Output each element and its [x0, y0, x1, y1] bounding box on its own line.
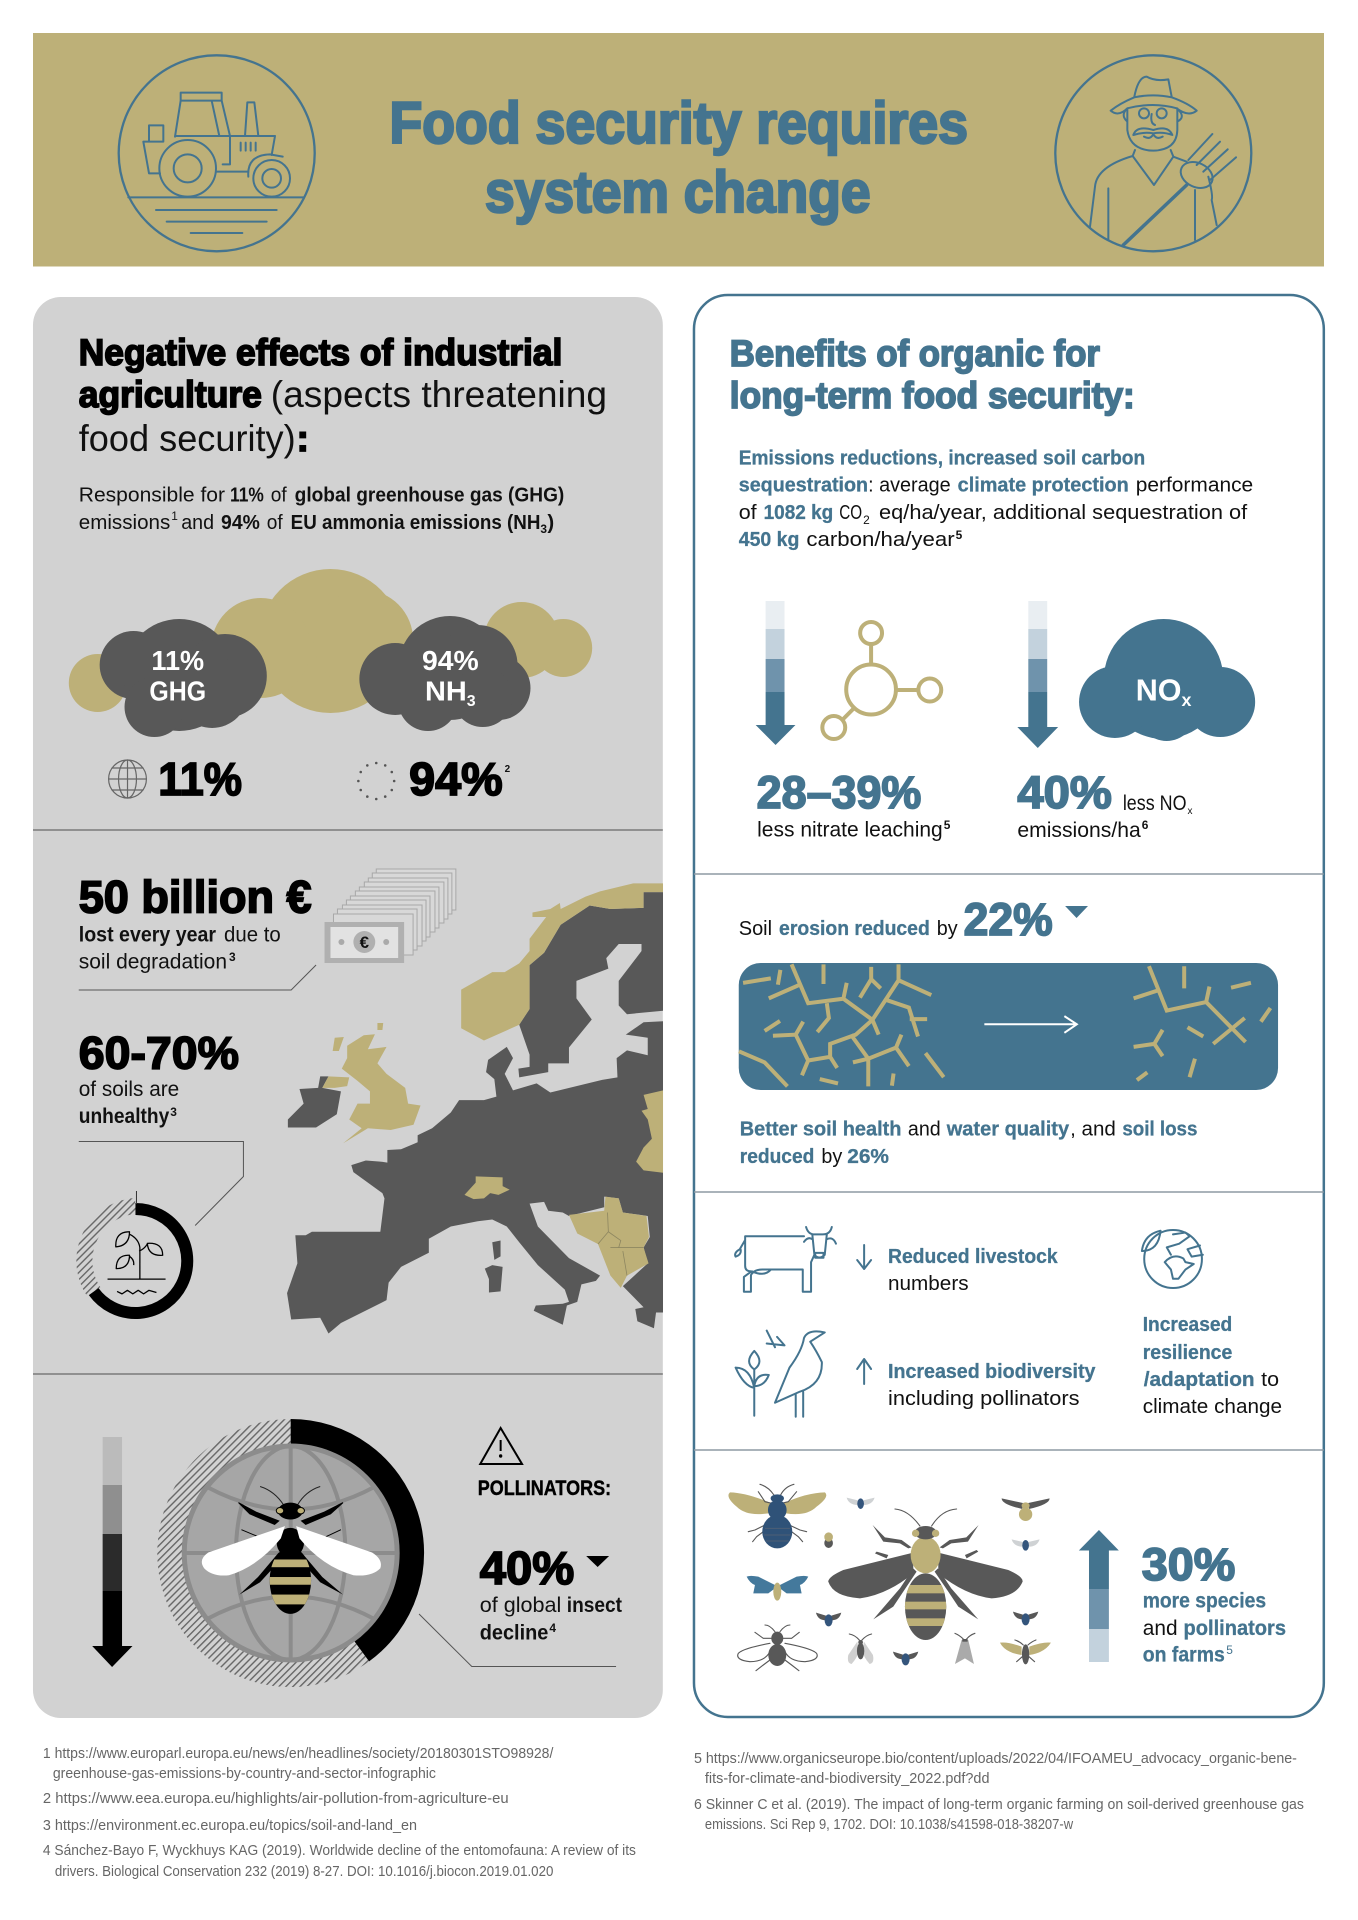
text: increased resilience: to — [1261, 1368, 1279, 1391]
gold emission clouds — [69, 569, 592, 713]
heading: benefits — [730, 333, 1135, 416]
stat: nitrate leaching — [757, 767, 951, 842]
stat: pollinators 40%: POLLINATORS: — [478, 1477, 611, 1500]
text: increased resilience: /adaptation — [1144, 1368, 1255, 1391]
stat: NOx emissions: 6 — [1142, 818, 1149, 832]
stat: 94% EU: 94% — [409, 753, 503, 805]
heading: negative effects: (aspects threatening — [271, 374, 607, 415]
text: increased resilience: climate change — [1143, 1395, 1282, 1418]
stat: pollinators 40%: of global — [480, 1594, 561, 1617]
footnotes: left: greenhouse-gas-emissions-by-country-and-sector-infographic — [53, 1766, 436, 1782]
icon: banknotes stack — [325, 869, 456, 963]
title: Food security requires — [390, 91, 968, 156]
stat: pollinators 40% — [419, 1477, 622, 1666]
text: better soil health: , and — [1070, 1117, 1116, 1141]
text: responsible for emissions: ) — [547, 511, 554, 534]
header banner — [33, 33, 1324, 266]
stat: 30% more species: and — [1143, 1617, 1178, 1640]
text: emissions reductions: 2 — [863, 513, 870, 527]
stat: 50 billion euro: lost every year — [79, 923, 216, 947]
footnotes: left: drivers. Biological Conservation 232 (2019) 8-27. DOI: 10.1016/j.biocon.2019.01.020 — [55, 1864, 553, 1880]
text: reduced livestock — [888, 1245, 1058, 1295]
text: reduced livestock: Reduced livestock — [888, 1245, 1058, 1268]
text: soil erosion reduced: by — [937, 917, 958, 940]
stat: NOx emissions: x — [1188, 806, 1192, 817]
bar arrow: declining pollinators — [92, 1437, 132, 1667]
text: emissions reductions: of — [739, 501, 757, 524]
bar arrow: up — [1079, 1530, 1119, 1662]
text: responsible for emissions: emissions — [79, 511, 170, 534]
footnotes: right: fits-for-climate-and-biodiversity_2022.pdf?dd — [705, 1771, 989, 1787]
text: emissions reductions: 450 kg — [739, 528, 799, 551]
arrow: up — [857, 1359, 871, 1384]
footnotes: right: 6 Skinner C et al. (2019). The impact of long-term organic farming on soil-derived greenhouse gas — [694, 1797, 1304, 1813]
text: increased biodiversity — [888, 1360, 1096, 1410]
heading: negative effects — [79, 332, 607, 459]
heading: negative effects: agriculture — [79, 374, 262, 415]
text: emissions reductions — [739, 446, 1253, 551]
text: increased biodiversity: Increased biodiversity — [888, 1360, 1096, 1383]
footnotes: left: 1 https://www.europarl.europa.eu/news/en/headlines/society/20180301STO98928/ — [43, 1746, 554, 1762]
text: responsible for emissions: Responsible for — [79, 483, 225, 507]
text: responsible for emissions: global greenhouse gas (GHG) — [295, 483, 564, 507]
text: better soil health: by — [821, 1145, 843, 1168]
insect: large pollinator bee — [828, 1509, 1023, 1640]
stat: 30% more species: more species — [1143, 1589, 1266, 1613]
text: increased resilience: Increased — [1143, 1313, 1232, 1336]
text: soil erosion reduced: erosion reduced — [779, 917, 930, 940]
footnotes: left: 4 Sánchez-Bayo F, Wyckhuys KAG (2019). Worldwide decline of the entomofauna: A review of its — [43, 1843, 636, 1859]
panel: negative effects of industrial agriculture — [33, 297, 663, 1718]
icon: NOx cloud: x — [1182, 690, 1192, 710]
stat: 60-70% unhealthy soils: unhealthy — [79, 1105, 170, 1128]
text: emissions reductions: sequestration — [739, 473, 868, 497]
icon: banknotes stack: € — [360, 933, 370, 952]
icon: bird and plant — [736, 1331, 825, 1417]
dark cloud: 94% NH3 — [359, 616, 530, 731]
stat: NOx emissions: 40% — [1017, 767, 1112, 818]
stat: pollinators 40%: 40% — [480, 1542, 574, 1594]
stat: 30% more species: 30% — [1142, 1539, 1235, 1590]
heading: benefits: long-term food security: — [730, 375, 1135, 416]
text: better soil health: reduced — [740, 1145, 814, 1168]
icon: tractor — [119, 55, 315, 251]
text: emissions reductions: eq/ha/year, additional sequestration of — [879, 501, 1248, 524]
stat: 50 billion euro: 50 billion € — [79, 871, 312, 923]
text: increased resilience: resilience — [1143, 1341, 1232, 1364]
stat: pollinators 40%: 4 — [549, 1621, 556, 1635]
footnotes: left — [43, 1746, 636, 1880]
footnotes: left: 3 https://environment.ec.europa.eu/topics/soil-and-land_en — [43, 1818, 417, 1834]
title — [390, 91, 968, 225]
insect: large navy beetle with gold wings — [728, 1484, 826, 1548]
text: emissions reductions: : average — [868, 473, 951, 497]
stat: nitrate leaching: 28–39% — [757, 767, 921, 818]
illustration: soil cracks before and after — [739, 963, 1278, 1090]
stat: 60-70% unhealthy soils: 3 — [170, 1105, 177, 1119]
footnotes: right: 5 https://www.organicseurope.bio/content/uploads/2022/04/IFOAMEU_advocacy_organic-bene- — [694, 1751, 1297, 1767]
text: responsible for emissions: EU ammonia emissions (NH — [291, 511, 540, 534]
text: increased resilience — [1143, 1313, 1282, 1418]
chart: 40% decline ring with globe and bee — [170, 1431, 412, 1675]
stat: 94% EU: 2 — [505, 764, 511, 775]
stat: NOx emissions: emissions/ha — [1017, 819, 1141, 842]
dark cloud: 94% NH3: 94% — [422, 645, 479, 676]
heading: negative effects: : — [297, 418, 309, 459]
text: reduced livestock: numbers — [888, 1272, 969, 1295]
heading: negative effects: Negative effects of industrial — [79, 332, 562, 373]
stat: NOx emissions: less NO — [1123, 792, 1187, 815]
text: better soil health: Better soil health — [740, 1117, 901, 1141]
text: responsible for emissions: of — [271, 483, 287, 507]
bar arrow: NOx — [1017, 601, 1058, 748]
icon: warning triangle — [480, 1428, 522, 1464]
text: emissions reductions: Emissions reductions, increased soil carbon — [739, 446, 1145, 470]
dark cloud: 11% GHG: 11% — [151, 645, 204, 676]
text: better soil health: water quality — [946, 1117, 1070, 1141]
stat: 60-70% unhealthy soils: 60-70% — [79, 1027, 239, 1079]
text: emissions reductions: 1082 kg — [764, 501, 833, 524]
text: responsible for emissions: 11% — [230, 483, 264, 507]
icon: EU stars — [357, 762, 395, 800]
footnotes: right: emissions. Sci Rep 9, 1702. DOI: 10.1038/s41598-018-38207-w — [705, 1817, 1074, 1833]
text: emissions reductions: carbon/ha/year — [806, 528, 955, 551]
text: responsible for emissions: 3 — [540, 522, 547, 536]
text: better soil health: 26% — [847, 1145, 889, 1168]
dark cloud: 11% GHG: GHG — [149, 675, 206, 707]
stat: 50 billion euro: soil degradation — [79, 950, 227, 974]
text: soil erosion reduced: Soil — [739, 917, 772, 940]
bar arrow: nitrate — [756, 601, 795, 745]
text: better soil health: and — [908, 1117, 941, 1141]
text: emissions reductions: 5 — [956, 528, 963, 542]
text: responsible for emissions: of — [267, 511, 283, 534]
text: emissions reductions: performance — [1136, 473, 1253, 497]
stat: 30% more species — [1142, 1539, 1286, 1667]
map: Europe — [287, 883, 663, 1334]
arrow: down — [857, 1245, 871, 1269]
icon: soil ring with plant — [84, 1191, 187, 1313]
stat: pollinators 40%: insect — [567, 1594, 622, 1617]
icon: earth with leaf — [1142, 1230, 1203, 1288]
stat: 50 billion euro: 3 — [229, 950, 236, 964]
icon: nitrate molecule — [822, 622, 941, 739]
footnotes: left: 2 https://www.eea.europa.eu/highlights/air-pollution-from-agriculture-eu — [43, 1791, 509, 1807]
text: emissions reductions: CO — [839, 501, 862, 524]
text: better soil health: soil loss — [1122, 1117, 1197, 1141]
title: system change — [485, 160, 870, 225]
panel: benefits of organic — [694, 295, 1324, 1717]
stat: 60-70% unhealthy soils: of soils are — [79, 1078, 179, 1101]
icon: cow — [735, 1227, 836, 1292]
text: responsible for emissions — [79, 483, 564, 536]
stat: 11% global: 11% — [158, 753, 242, 805]
stat: NOx emissions — [1017, 767, 1192, 842]
stat: nitrate leaching: 5 — [944, 818, 951, 832]
icon: bee — [202, 1486, 381, 1614]
stat: nitrate leaching: less nitrate leaching — [757, 818, 943, 842]
footnotes: right — [694, 1751, 1304, 1833]
illustration: pollinator insects — [728, 1484, 1051, 1671]
heading: benefits: Benefits of organic for — [730, 333, 1100, 374]
heading: negative effects: food security) — [79, 418, 296, 459]
text: increased biodiversity: including pollinators — [888, 1387, 1080, 1410]
stat: 30% more species: 5 — [1226, 1643, 1233, 1657]
stat: 60-70% unhealthy soils — [79, 1027, 243, 1226]
text: better soil health — [740, 1117, 1197, 1168]
text: responsible for emissions: 1 — [171, 509, 178, 523]
dark cloud: 94% NH3: NH — [425, 675, 467, 707]
stat: 30% more species: on farms — [1143, 1643, 1225, 1667]
text: responsible for emissions: 94% — [221, 511, 260, 534]
icon: globe — [109, 760, 146, 798]
stat: 50 billion euro — [79, 871, 316, 990]
stat: 30% more species: pollinators — [1184, 1617, 1286, 1640]
insects: small pollinators — [738, 1498, 1051, 1671]
icon: NOx cloud: NO — [1136, 672, 1182, 708]
dark cloud: 94% NH3: 3 — [467, 693, 476, 710]
icon: NOx cloud — [1079, 619, 1255, 741]
stat: pollinators 40%: decline — [480, 1621, 548, 1645]
text: responsible for emissions: and — [181, 511, 214, 534]
text: soil erosion reduced: 22% — [964, 894, 1053, 945]
text: emissions reductions: climate protection — [958, 473, 1129, 497]
dark cloud: 11% GHG — [100, 619, 267, 737]
icon: farmer with pitchfork — [1055, 55, 1251, 251]
text: soil erosion reduced — [739, 894, 1088, 945]
stat: 50 billion euro: due to — [224, 923, 281, 947]
